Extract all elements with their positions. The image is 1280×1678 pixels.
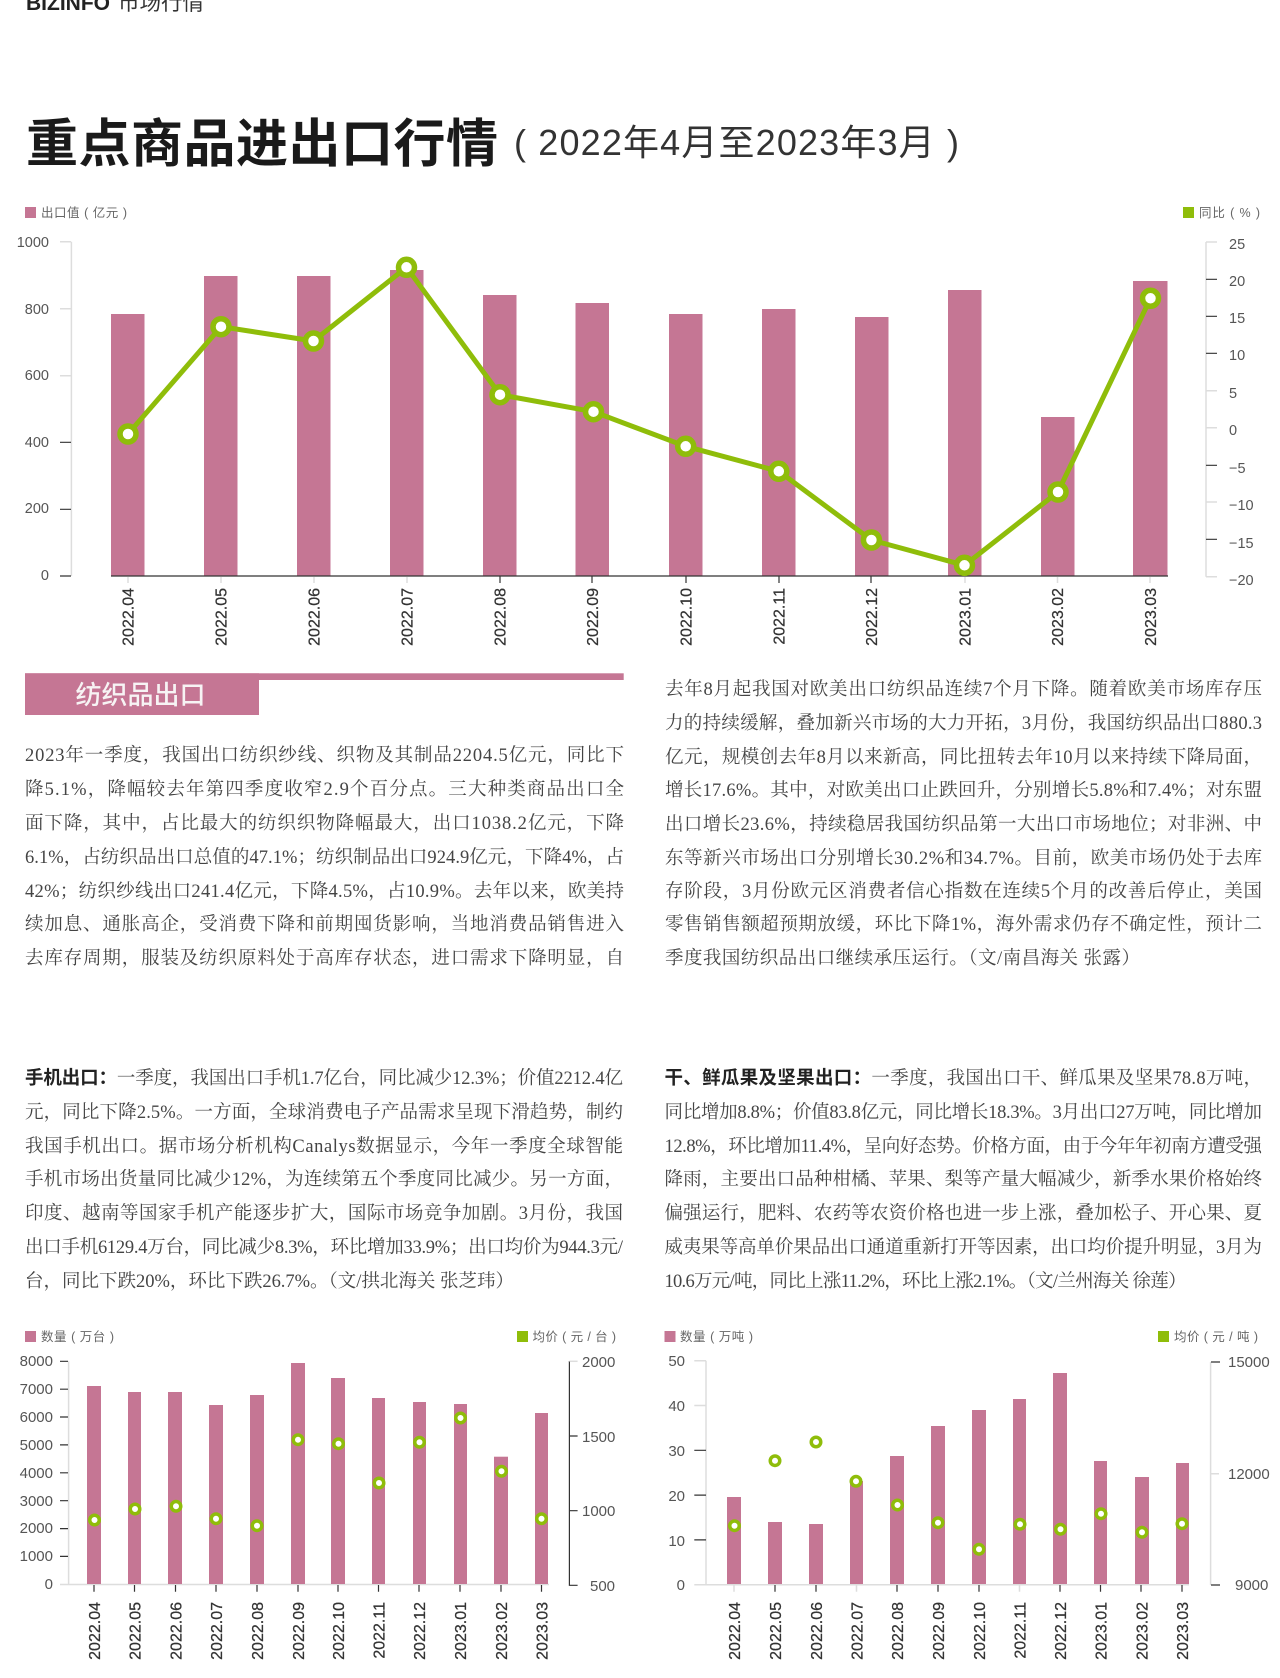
- x axis and month labels: 2022.07: [400, 588, 416, 646]
- line: year on year: [120, 259, 1158, 573]
- right axis: 2000: [582, 1354, 615, 1371]
- month labels and ticks: 2022.05: [768, 1602, 785, 1660]
- month labels and ticks: 2022.06: [168, 1602, 186, 1660]
- bars: fruit quantity: [727, 1373, 1189, 1584]
- text block: fruit and nut exports: 10.6万元/吨，同比上涨11.2%，环比上涨2.1%。（文/兰州海关 徐莲）: [664, 1271, 1186, 1292]
- title: ( 2022年4月至2023年3月 ): [514, 122, 959, 163]
- section heading: textile exports: 纺织品出口: [76, 680, 206, 710]
- text block: phone exports: 手机市场出货量同比减少12%，为连续第五个季度同比减少。另一方面，: [25, 1169, 623, 1190]
- month labels and ticks: 2022.08: [890, 1602, 907, 1660]
- left axis: [20, 1353, 549, 1593]
- left axis: [17, 235, 71, 584]
- combo chart: fruit and nuts: [664, 1329, 1270, 1660]
- left axis: [668, 1353, 1189, 1594]
- text block: fruit and nut exports: 威夷果等高单价果品出口通道重新打开等因素，出口均价提升明显，3月为: [664, 1237, 1262, 1258]
- text block: fruit and nut exports: 降雨，主要出口品种柑橘、苹果、梨等产量大幅减少，新季水果价格始终: [664, 1168, 1262, 1190]
- x axis and month labels: 2022.09: [585, 588, 602, 646]
- text block: phone exports: 元，同比下降2.5%。一方面，全球消费电子产品需求呈现下滑趋势，制约: [25, 1102, 623, 1123]
- right axis: 25: [1229, 237, 1245, 253]
- month labels and ticks: [727, 1585, 1192, 1660]
- left axis: 2000: [20, 1520, 53, 1537]
- left axis: 3000: [20, 1493, 53, 1510]
- markers: fruit average price: [730, 1437, 1187, 1554]
- left axis: 0: [41, 568, 49, 584]
- section heading: textile exports: [25, 673, 624, 715]
- right axis: [1211, 1354, 1270, 1594]
- month labels and ticks: 2022.04: [87, 1602, 104, 1660]
- right axis: 500: [590, 1578, 615, 1595]
- month labels and ticks: 2023.02: [494, 1602, 511, 1660]
- text block: phone exports: 台，同比下跌20%，环比下跌26.7%。（文/拱北海关 张芝玮）: [25, 1271, 514, 1292]
- month labels and ticks: 2022.09: [931, 1602, 948, 1660]
- title: 重点商品进出口行情: [26, 116, 498, 174]
- text block: textile right column: 亿元，规模创去年8月以来新高，同比扭转去年10月以来持续下降局面，: [665, 746, 1262, 768]
- right axis: 15: [1229, 311, 1245, 327]
- left axis: 40: [668, 1398, 685, 1415]
- text block: textile right column: 季度我国纺织品出口继续承压运行。（文/南昌海关 张露）: [665, 947, 1140, 969]
- left axis: 20: [668, 1488, 685, 1505]
- combo chart: phones: [20, 1329, 616, 1660]
- right axis: 1000: [582, 1503, 615, 1520]
- right axis: 0: [1229, 423, 1237, 439]
- left axis: 10: [668, 1533, 685, 1550]
- month labels and ticks: 2022.07: [209, 1602, 226, 1660]
- x axis and month labels: 2022.10: [678, 588, 696, 646]
- left axis: 1000: [20, 1548, 53, 1565]
- right axis: 1500: [582, 1429, 615, 1446]
- right axis: [569, 1354, 615, 1595]
- right axis: −20: [1229, 573, 1254, 589]
- month labels and ticks: 2023.03: [534, 1602, 552, 1660]
- left axis: 7000: [20, 1381, 53, 1398]
- legend: phone quantity: 数量 ( 万台 ): [41, 1329, 114, 1344]
- right axis: 12000: [1228, 1466, 1270, 1483]
- legend: phone average price: 均价 ( 元 / 台 ): [532, 1329, 616, 1344]
- combo chart: textile exports: [17, 205, 1260, 646]
- x axis and month labels: 2023.02: [1050, 588, 1067, 646]
- text block: textile right column: 东等新兴市场出口分别增长30.2%和34.7%。目前，欧美市场仍处于去库: [665, 848, 1262, 869]
- text block: textile right column: 零售销售额超预期放缓，环比下降1%，海外需求仍存不确定性，预计二: [665, 913, 1262, 935]
- text block: fruit and nut exports: [664, 1067, 1262, 1292]
- right axis: −15: [1229, 536, 1254, 552]
- month labels and ticks: 2022.11: [372, 1602, 388, 1659]
- x axis and month labels: 2022.06: [306, 588, 324, 646]
- month labels and ticks: 2022.12: [1053, 1602, 1070, 1660]
- month labels and ticks: 2023.01: [1094, 1602, 1110, 1660]
- legend: fruit quantity: 数量 ( 万吨 ): [680, 1329, 753, 1344]
- right axis: 15000: [1228, 1354, 1270, 1371]
- text block: phone exports: 手机出口：一季度，我国出口手机1.7亿台，同比减少12.3%；价值2212.4亿: [25, 1067, 623, 1089]
- text block: phone exports: 出口手机6129.4万台，同比减少8.3%，环比增加33.9%；出口均价为944.3元/: [25, 1237, 624, 1258]
- left axis: 0: [677, 1577, 685, 1594]
- left axis: 400: [25, 435, 49, 451]
- left axis: 1000: [17, 235, 49, 251]
- month labels and ticks: [87, 1585, 552, 1660]
- month labels and ticks: 2022.06: [809, 1602, 826, 1660]
- month labels and ticks: 2022.09: [291, 1602, 308, 1660]
- text block: fruit and nut exports: 干、鲜瓜果及坚果出口：一季度，我国出口干、鲜瓜果及坚果78.8万吨，: [664, 1067, 1262, 1089]
- text block: textile left column: 去库存周期，服装及纺织原料处于高库存状态，进口需求下降明显，自: [25, 948, 624, 969]
- left axis: 0: [45, 1576, 53, 1593]
- left axis: 50: [668, 1353, 685, 1370]
- right axis: 5: [1229, 386, 1237, 402]
- left axis: 5000: [20, 1437, 53, 1454]
- left axis: 30: [668, 1443, 685, 1460]
- text block: textile right column: 出口增长23.6%，持续稳居我国纺织品第一大出口市场地位；对非洲、中: [665, 814, 1262, 835]
- right axis: [1206, 237, 1254, 589]
- text block: textile left column: 面下降，其中，占比最大的纺织织物降幅最大，出口1038.2亿元，下降: [25, 813, 624, 834]
- left axis: 800: [25, 302, 49, 318]
- x axis and month labels: 2022.12: [864, 588, 881, 646]
- bars: export value: [111, 270, 1168, 576]
- text block: phone exports: 印度、越南等国家手机产能逐步扩大，国际市场竞争加剧。3月份，我国: [25, 1202, 623, 1224]
- text block: fruit and nut exports: 偏强运行，肥料、农药等农资价格也进一步上涨，叠加松子、开心果、夏: [664, 1203, 1262, 1224]
- text block: textile left column: 续加息、通胀高企，受消费下降和前期囤货影响，当地消费品销售进入: [25, 914, 624, 935]
- text block: phone exports: 我国手机出口。据市场分析机构Canalys数据显示，今年一季度全球智能: [25, 1135, 623, 1157]
- month labels and ticks: 2022.10: [331, 1602, 348, 1660]
- page header: [26, 0, 204, 15]
- text block: textile left column: 2023年一季度，我国出口纺织纱线、织物及其制品2204.5亿元，同比下: [25, 744, 624, 766]
- right axis: 9000: [1235, 1577, 1268, 1594]
- text block: textile right column: 存阶段，3月份欧元区消费者信心指数在连续5个月的改善后停止，美国: [665, 881, 1262, 902]
- right axis: −10: [1229, 498, 1254, 514]
- text block: textile right column: 去年8月起我国对欧美出口纺织品连续7个月下降。随着欧美市场库存压: [665, 678, 1262, 700]
- left axis: 8000: [20, 1353, 53, 1370]
- left axis: 600: [25, 368, 49, 384]
- month labels and ticks: 2023.02: [1134, 1602, 1152, 1660]
- text block: phone exports: [25, 1067, 624, 1292]
- right axis: −5: [1229, 461, 1246, 477]
- month labels and ticks: 2022.05: [128, 1602, 144, 1660]
- legend: fruit average price: 均价 ( 元 / 吨 ): [1174, 1330, 1258, 1344]
- text block: textile right column: 增长17.6%。其中，对欧美出口止跌回升，分别增长5.8%和7.4%；对东盟: [665, 780, 1262, 801]
- text block: textile left column: [25, 744, 624, 969]
- month labels and ticks: 2023.01: [453, 1602, 470, 1660]
- title: [26, 116, 959, 174]
- x axis and month labels: 2023.01: [958, 588, 974, 646]
- x axis and month labels: [111, 576, 1168, 646]
- month labels and ticks: 2022.08: [250, 1602, 267, 1660]
- legend: export value: 出口值 ( 亿元 ): [41, 205, 127, 220]
- month labels and ticks: 2023.03: [1175, 1602, 1192, 1660]
- text block: textile left column: 降5.1%，降幅较去年第四季度收窄2.9个百分点。三大种类商品出口全: [25, 778, 624, 800]
- text block: textile right column: 力的持续缓解，叠加新兴市场的大力开拓，3月份，我国纺织品出口880.3: [665, 713, 1262, 734]
- text block: textile left column: 42%；纺织纱线出口241.4亿元，下降4.5%，占10.9%。去年以来，欧美持: [25, 880, 624, 902]
- month labels and ticks: 2022.10: [972, 1602, 989, 1660]
- left axis: 4000: [20, 1465, 53, 1482]
- text block: fruit and nut exports: 12.8%，环比增加11.4%，呈向好态势。价格方面，由于今年年初南方遭受强: [664, 1135, 1262, 1157]
- month labels and ticks: 2022.04: [727, 1602, 744, 1660]
- month labels and ticks: 2022.07: [850, 1602, 866, 1660]
- left axis: 200: [25, 501, 49, 517]
- right axis: 20: [1229, 274, 1245, 290]
- x axis and month labels: 2022.05: [214, 588, 230, 646]
- right axis: 10: [1229, 348, 1245, 364]
- left axis: 6000: [20, 1409, 53, 1426]
- x axis and month labels: 2022.08: [492, 588, 510, 646]
- text block: textile left column: 6.1%，占纺织品出口总值的47.1%；纺织制品出口924.9亿元，下降4%，占: [25, 847, 624, 868]
- text block: fruit and nut exports: 同比增加8.8%；价值83.8亿元，同比增长18.3%。3月出口27万吨，同比增加: [664, 1102, 1262, 1123]
- text block: textile right column: [665, 678, 1262, 969]
- bars: phone quantity: [87, 1363, 548, 1584]
- month labels and ticks: 2022.12: [412, 1602, 429, 1660]
- markers: phone average price: [90, 1413, 546, 1530]
- month labels and ticks: 2022.11: [1012, 1602, 1030, 1659]
- x axis and month labels: 2022.04: [120, 588, 138, 646]
- legend: year on year: 同比 ( % ): [1199, 206, 1260, 220]
- x axis and month labels: 2022.11: [772, 588, 788, 645]
- x axis and month labels: 2023.03: [1143, 588, 1160, 646]
